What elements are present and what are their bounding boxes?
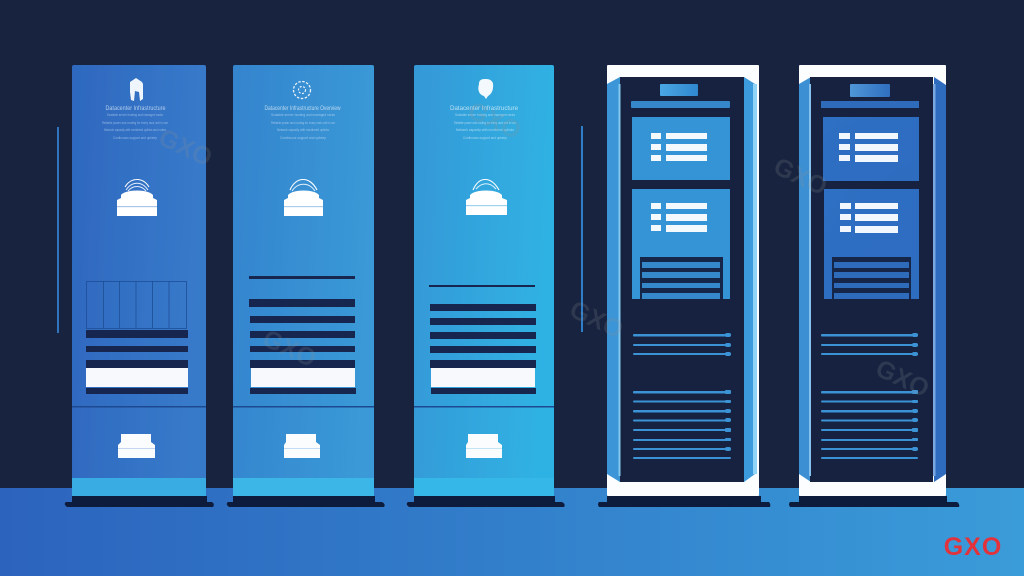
icon: tower <box>130 78 143 101</box>
icon: dome unit <box>117 180 157 216</box>
cyan band <box>72 478 206 496</box>
dark bars <box>429 285 536 394</box>
grid block <box>86 281 186 328</box>
body text <box>454 113 516 140</box>
body text: Scalable server hosting and managed racks <box>107 113 163 117</box>
icon: dotted gear <box>294 82 310 98</box>
header bar <box>821 101 919 108</box>
rack frame <box>799 65 946 496</box>
inner cabinet <box>620 77 744 482</box>
vent grille <box>640 257 723 299</box>
watermarks: GXO <box>258 324 320 373</box>
cyan band <box>233 478 374 496</box>
right light strip <box>753 84 757 474</box>
divider <box>72 406 206 408</box>
heading text: Datacenter Infrastructure <box>106 106 166 112</box>
panel: server rack 2 <box>789 65 959 507</box>
watermarks: GXO <box>463 96 525 145</box>
divider <box>233 406 374 408</box>
icon: small unit <box>466 434 502 458</box>
side column left <box>607 77 620 482</box>
display <box>850 84 890 97</box>
panel: server rack 1 <box>598 65 770 507</box>
cable lines group 1 <box>821 333 918 356</box>
panel: banner 2 <box>227 65 385 507</box>
left light strip <box>618 84 620 476</box>
heading text: Datacenter Infrastructure <box>450 106 519 112</box>
body text: Network capacity with monitored uplinks <box>277 128 329 132</box>
screen 1 <box>823 117 919 181</box>
floor <box>0 488 1024 576</box>
watermarks: GXO <box>154 123 216 172</box>
right light strip <box>933 84 936 476</box>
base <box>65 496 214 507</box>
dark bars <box>249 276 356 394</box>
icon: small unit <box>118 434 155 458</box>
inner cabinet <box>810 77 933 482</box>
icon: round emblem <box>478 79 493 99</box>
base <box>407 496 565 507</box>
body text: Scalable server hosting and managed racks <box>455 113 515 117</box>
accent line left <box>57 127 59 333</box>
watermarks: GXO <box>871 354 933 403</box>
body text: Scalable server hosting and managed racks <box>271 113 335 117</box>
white bar <box>86 368 188 387</box>
watermarks: GXO <box>565 295 627 344</box>
body text: Continuous support and upkeep <box>280 136 326 140</box>
cable lines group 2 <box>821 390 918 459</box>
screen 2 <box>824 189 919 299</box>
body text: Reliable power and cooling for every rack unit in use <box>271 121 335 125</box>
watermarks: GXO <box>769 152 831 201</box>
brand logo text: GXO <box>944 533 1002 561</box>
header bar <box>631 101 730 108</box>
dark bars <box>86 330 188 394</box>
body text <box>102 113 168 140</box>
body text: Network capacity with monitored uplinks and routes <box>104 128 166 132</box>
base <box>227 496 385 507</box>
cyan band <box>414 478 554 496</box>
watermarks <box>154 96 933 403</box>
icon: small unit <box>284 434 320 458</box>
side column right <box>934 77 946 482</box>
icon: dome unit <box>466 180 507 215</box>
screen 1 <box>632 117 730 180</box>
vent grille <box>832 257 911 299</box>
body text: Continuous support and upkeep <box>463 136 507 140</box>
body text: Reliable power and cooling for every rack unit in use <box>454 121 516 125</box>
rack frame <box>607 65 759 496</box>
display <box>660 84 698 96</box>
cable lines group 2 <box>633 390 731 459</box>
white bar <box>431 368 535 387</box>
side column left <box>799 77 811 482</box>
base <box>789 496 959 507</box>
white bar <box>251 368 355 387</box>
panel: banner 3 <box>407 65 565 507</box>
body text: Continuous support and upkeep <box>113 136 157 140</box>
base <box>598 496 770 507</box>
panel: banner 1 <box>65 65 214 507</box>
body text: Network capacity with monitored uplinks <box>456 128 514 132</box>
left light strip <box>809 84 811 476</box>
heading text: Datacenter Infrastructure Overview <box>264 106 341 112</box>
screen 2 <box>632 189 730 299</box>
divider <box>414 406 554 408</box>
side column right <box>744 77 755 482</box>
body text <box>271 113 335 140</box>
body text: Reliable power and cooling for every rack unit in use <box>102 121 168 125</box>
icon: dome unit <box>284 180 323 216</box>
accent line middle <box>581 126 583 332</box>
cable lines group 1 <box>633 333 731 356</box>
